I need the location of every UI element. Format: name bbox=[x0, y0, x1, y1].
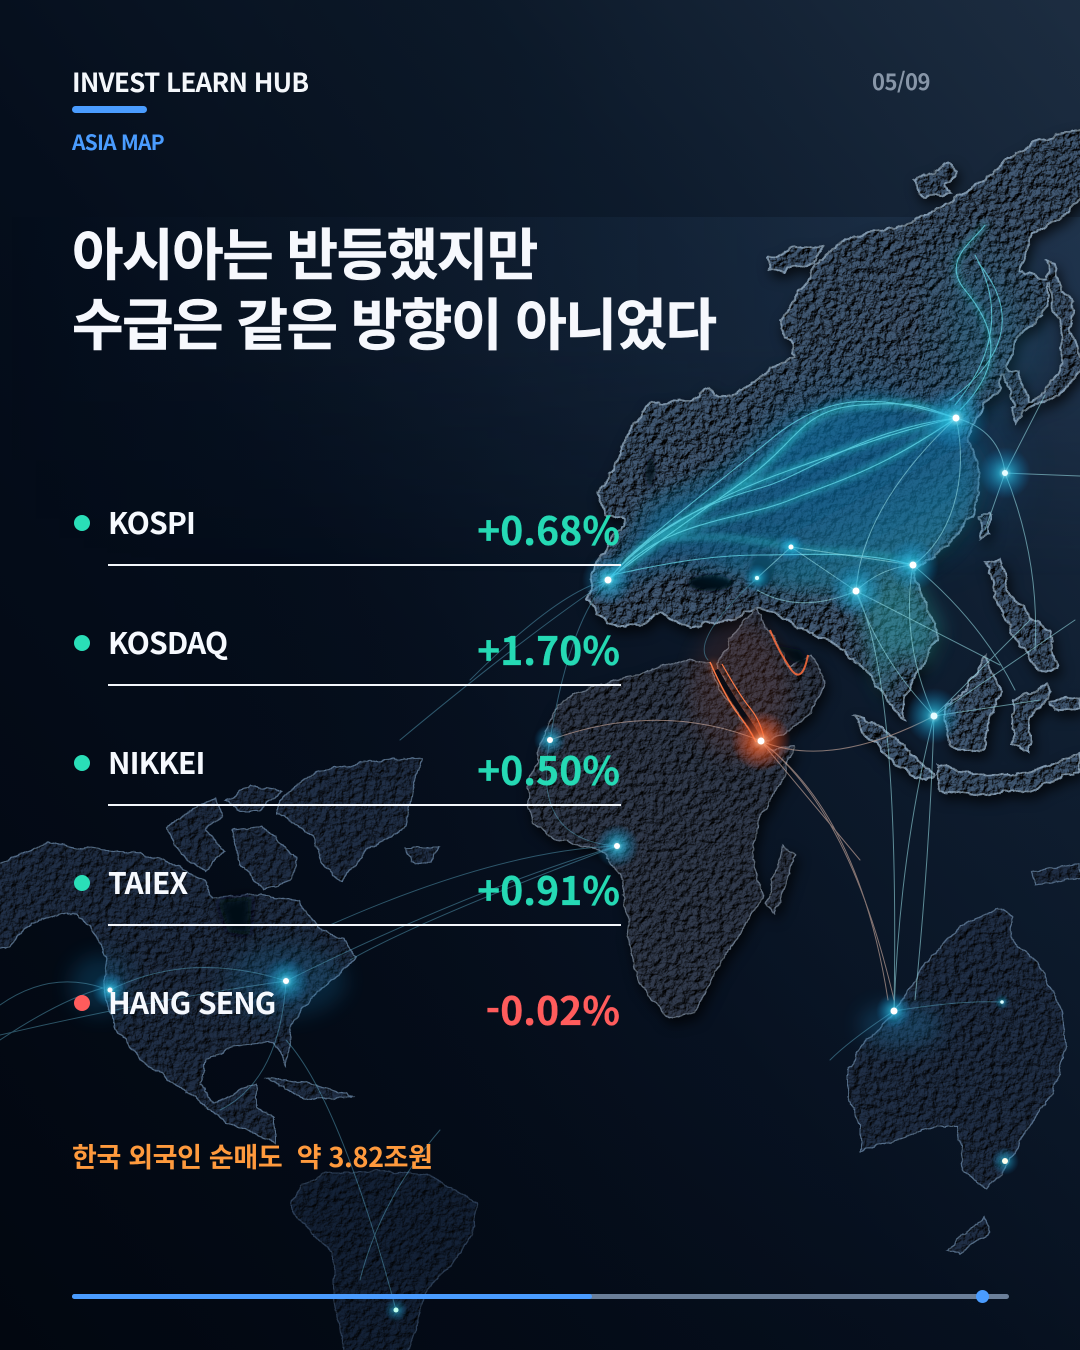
row: KOSPI bbox=[74, 499, 621, 566]
index name: HANG SENG bbox=[108, 979, 275, 1023]
index change: +0.68% bbox=[477, 501, 620, 557]
index name: NIKKEI bbox=[108, 739, 204, 783]
index change: +1.70% bbox=[477, 621, 620, 677]
row: HANG SENG bbox=[74, 979, 620, 1037]
continents: Asia and Europe bbox=[585, 128, 1080, 797]
index change: +0.50% bbox=[477, 741, 620, 797]
continents: Americas north and Australia bbox=[0, 757, 1080, 1255]
status dot bbox=[74, 515, 90, 531]
brand accent bar bbox=[72, 106, 147, 113]
status dot bbox=[74, 755, 90, 771]
index change: -0.02% bbox=[486, 981, 620, 1037]
seas cut into land bbox=[217, 452, 812, 936]
section label: ASIA MAP bbox=[72, 127, 164, 157]
continents: Africa and Arabia bbox=[526, 606, 826, 1020]
status dot bbox=[74, 875, 90, 891]
foreign net selling note: 한국 외국인 순매도 약 3.82조원 bbox=[72, 1136, 433, 1175]
row: NIKKEI bbox=[74, 739, 621, 806]
node markers bbox=[92, 384, 1031, 1322]
glow: China and Central Asia bbox=[70, 255, 1030, 1047]
page number: 05/09 bbox=[872, 65, 930, 97]
row: KOSDAQ bbox=[74, 619, 621, 686]
index name: TAIEX bbox=[108, 859, 187, 903]
progress bar bbox=[72, 1290, 1009, 1303]
index name: KOSPI bbox=[108, 499, 195, 543]
brand name: INVEST LEARN HUB bbox=[72, 63, 308, 100]
status dot bbox=[74, 635, 90, 651]
continent: South America bbox=[291, 1170, 478, 1350]
row: TAIEX bbox=[74, 859, 621, 926]
index change: +0.91% bbox=[477, 861, 620, 917]
index name: KOSDAQ bbox=[108, 619, 227, 663]
title: 아시아는 반등했지만 수급은 같은 방향이 아니었다 bbox=[72, 211, 716, 362]
status dot bbox=[74, 995, 90, 1011]
red glow: Red Sea bbox=[690, 620, 808, 760]
